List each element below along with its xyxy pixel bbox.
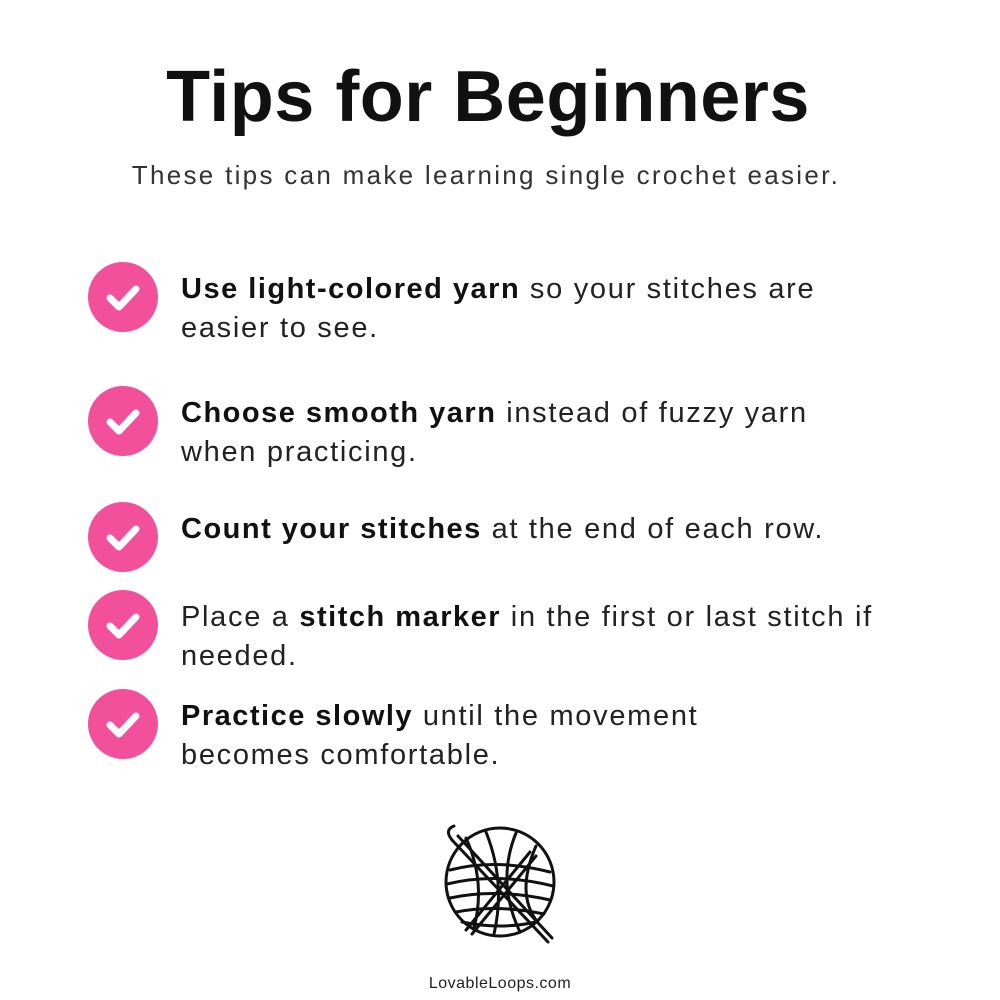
text: Place a stitch marker in the first or last stitch if — [181, 601, 873, 633]
text: becomes comfortable. — [181, 739, 500, 771]
icon: check — [88, 386, 158, 456]
icon: check — [88, 502, 158, 572]
icon: check — [88, 689, 158, 759]
text: needed. — [181, 640, 298, 672]
footer: website: LovableLoops.com — [429, 975, 571, 992]
text: Use light-colored yarn so your stitches are — [181, 273, 815, 305]
icon: check — [88, 262, 158, 332]
tip 2 — [88, 386, 808, 468]
text: when practicing. — [181, 436, 418, 468]
text: Choose smooth yarn instead of fuzzy yarn — [181, 397, 808, 429]
title: Tips for Beginners — [166, 57, 810, 137]
subtitle: These tips can make learning single crochet easier. — [132, 160, 840, 190]
text — [181, 700, 698, 771]
tip 3 — [88, 502, 824, 572]
icon: check — [88, 590, 158, 660]
text: easier to see. — [181, 312, 379, 344]
text: Count your stitches at the end of each row. — [181, 513, 824, 545]
tip 1 — [88, 262, 815, 344]
tip 4 — [88, 590, 873, 672]
icon: yarn ball with hook — [444, 824, 556, 944]
tip 5 — [88, 689, 698, 771]
text — [181, 601, 873, 672]
text: Practice slowly until the movement — [181, 700, 698, 732]
text — [181, 273, 815, 344]
text — [181, 397, 808, 468]
